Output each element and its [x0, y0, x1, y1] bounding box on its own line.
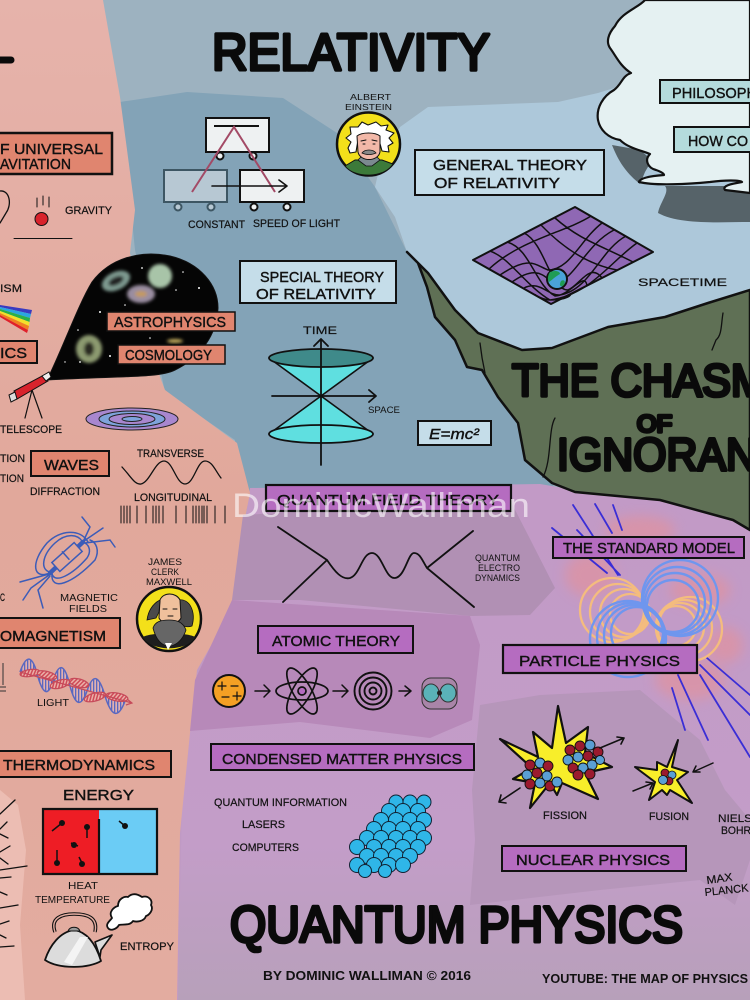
icon: fusion star [635, 740, 692, 803]
label box [211, 744, 474, 770]
title: of: OF [637, 411, 672, 438]
label text: optics: ICS [0, 345, 27, 362]
panel: electromagnetism [0, 517, 201, 713]
label: planck: PLANCK [704, 882, 750, 899]
label: fission: FISSION [543, 810, 587, 822]
label text: how: HOW CO [688, 133, 748, 150]
label: qed line three: DYNAMICS [475, 573, 520, 583]
fission arrows [499, 737, 624, 803]
title: relativity: RELATIVITY [212, 24, 490, 82]
label box [0, 133, 112, 174]
label: spacetime: SPACETIME [638, 277, 727, 289]
chart: light cone [269, 325, 400, 465]
label: fields: FIELDS [69, 604, 107, 615]
name line one: ALBERT [350, 93, 391, 102]
label box: cosmology [118, 345, 225, 364]
moustache [362, 150, 376, 154]
label fragments: TION [0, 453, 25, 465]
label text: ATOMIC THEORY [272, 633, 400, 650]
membrane [473, 207, 653, 304]
blue jets [552, 504, 750, 757]
background: quantum field theory region [232, 500, 555, 616]
label: computers: COMPUTERS [232, 842, 299, 854]
label box [266, 485, 511, 511]
icon: crystal lattice [350, 795, 432, 878]
label text: waves: WAVES [44, 457, 99, 474]
label box: how [674, 127, 750, 152]
cones [269, 358, 373, 434]
lower left faded carriage [164, 170, 227, 210]
arrow [255, 685, 270, 697]
box [415, 150, 604, 195]
credit: youtube: YOUTUBE: THE MAP OF PHYSICS [542, 972, 748, 986]
portrait: Einstein [337, 93, 400, 176]
features [361, 140, 377, 144]
icon: telescope [9, 372, 51, 418]
background: classical physics region [0, 0, 250, 1000]
icon: magnetic field [20, 517, 115, 608]
icon: ripple rings [86, 408, 178, 430]
label line one: F UNIVERSAL [0, 141, 103, 158]
credit: author: BY DOMINIC WALLIMAN © 2016 [263, 969, 471, 983]
chart: spacetime grid [473, 207, 727, 304]
label: space: SPACE [368, 405, 400, 416]
label: heat: HEAT [68, 881, 98, 892]
icon: orbital atom [276, 664, 328, 718]
label box [0, 618, 120, 648]
box [418, 421, 491, 445]
cloud shadow: left [612, 145, 652, 184]
label: light: LIGHT [37, 698, 69, 709]
background: chasm of ignorance [407, 252, 750, 530]
label fragment: C [0, 592, 5, 604]
wheels upper [216, 152, 256, 160]
warped grid lines [489, 216, 637, 300]
panel: quantum field theory [266, 485, 520, 607]
label: james: JAMES [148, 557, 182, 567]
label box: philosophy [660, 80, 750, 103]
panel: general relativity train [164, 118, 340, 231]
cloud shadow: right [658, 186, 750, 222]
lower right carriage [240, 170, 304, 210]
top rim [269, 349, 373, 367]
longitudinal wave [121, 506, 225, 523]
name line two: EINSTEIN [345, 103, 392, 112]
label text: standard model: THE STANDARD MODEL [563, 540, 735, 557]
label: max: MAX [706, 871, 734, 887]
panel: nuclear physics [499, 706, 750, 899]
chasm cracks [480, 313, 723, 477]
label: constant: CONSTANT [188, 219, 245, 231]
panel: universal gravitation [0, 133, 113, 238]
background: lower-left pale wedge [0, 790, 26, 1000]
label text: QUANTUM FIELD THEORY [277, 492, 499, 509]
label text: particle physics: PARTICLE PHYSICS [519, 653, 680, 670]
label box [0, 751, 171, 777]
collar [358, 156, 380, 166]
orange rings [580, 578, 722, 661]
label: transverse: TRANSVERSE [137, 448, 204, 460]
mirror [214, 125, 259, 127]
label: prism: ISM [0, 283, 22, 295]
label: fusion: FUSION [649, 811, 689, 823]
fusion nucleus [658, 769, 676, 785]
background: relativity region [0, 0, 750, 520]
background: darker special relativity region [120, 92, 560, 510]
axes [272, 339, 376, 465]
small title fragment [0, 56, 11, 64]
light path [192, 127, 275, 192]
panel: optics [0, 283, 37, 363]
label box: optics [0, 341, 37, 363]
icon: light wave [20, 659, 132, 713]
label text: nuclear physics: NUCLEAR PHYSICS [516, 852, 670, 869]
label text: cosmology: COSMOLOGY [125, 347, 212, 364]
label: energy: ENERGY [63, 787, 134, 804]
background: atomic theory region [190, 600, 480, 738]
label box: nuclear physics [502, 846, 686, 871]
label text: astrophysics: ASTROPHYSICS [114, 314, 226, 331]
hair [346, 122, 394, 153]
feynman diagram [278, 527, 474, 607]
label box: astrophysics [107, 312, 235, 331]
label line two: AVITATION [0, 156, 71, 173]
left spikes [0, 800, 27, 947]
label fragments lower: TION [0, 473, 24, 485]
ground line [14, 238, 72, 240]
bottom rim [269, 425, 373, 443]
gas chamber cold [99, 809, 157, 874]
fission nucleus left [522, 758, 562, 791]
background: general relativity region [375, 80, 750, 350]
label: entropy: ENTROPY [120, 941, 175, 953]
arrow [333, 685, 348, 697]
label: time: TIME [303, 325, 337, 337]
title: quantum physics: QUANTUM PHYSICS [230, 896, 683, 953]
label box: waves [31, 451, 109, 476]
label: maxwell: MAXWELL [146, 577, 192, 587]
icon: rainbow prism [0, 305, 32, 333]
label: magnetic: MAGNETIC [60, 593, 118, 604]
panel: special relativity [240, 261, 396, 303]
gas chamber hot [43, 809, 99, 874]
panel: philosophy cloud [598, 0, 750, 193]
label box: particle physics [503, 645, 697, 673]
fusion arrows [633, 763, 713, 791]
upper carriage [206, 118, 269, 152]
line two: OF RELATIVITY [256, 286, 376, 303]
icon: earth [547, 269, 567, 289]
transverse wave [122, 461, 221, 484]
icon: falling apple [35, 196, 49, 226]
capacitor fragment [0, 663, 6, 691]
panel: atomic theory [213, 626, 457, 718]
pink particle haze [565, 516, 743, 700]
portrait: Maxwell [137, 587, 201, 651]
label box [240, 261, 396, 303]
panel: standard model collision [503, 504, 750, 757]
galaxies [76, 264, 183, 363]
icon: bulb curve [0, 191, 9, 223]
icon: plum pudding atom [213, 675, 245, 707]
portrait circle [337, 112, 400, 176]
face [357, 133, 380, 160]
icon: electron cloud orbital [422, 678, 457, 709]
label: qed line two: ELECTRO [478, 563, 520, 573]
label text: CONDENSED MATTER PHYSICS [222, 751, 462, 768]
cloud outline [598, 0, 750, 193]
label box: standard model [553, 537, 744, 558]
motion arrow [212, 180, 287, 192]
icon: fission star [500, 706, 612, 808]
equation: E=mc² [429, 426, 480, 443]
label text: OMAGNETISM [0, 628, 106, 645]
label: qed line one: QUANTUM [475, 553, 520, 563]
label: quantum information: QUANTUM INFORMATION [214, 797, 347, 809]
panel: general theory label [415, 150, 604, 195]
label: gravity: GRAVITY [65, 205, 113, 217]
icon: bohr rings [354, 672, 392, 710]
panel: astrophysics bubble [47, 254, 235, 380]
equation box [418, 421, 491, 445]
background: nuclear region [470, 690, 750, 905]
blue rings [590, 560, 718, 677]
label: temperature: TEMPERATURE [35, 895, 110, 906]
gas molecules [52, 820, 128, 867]
label: telescope: TELESCOPE [0, 424, 62, 436]
background: quantum physics region [178, 484, 750, 1000]
stars [64, 267, 206, 363]
panel: condensed matter [211, 744, 474, 878]
arrow [399, 686, 411, 696]
black space bubble [47, 254, 218, 380]
panel: thermodynamics [0, 751, 175, 967]
chamber frame [43, 809, 157, 874]
line two: OF RELATIVITY [434, 175, 560, 192]
label box [258, 626, 413, 653]
label: niels: NIELS [718, 813, 750, 825]
fission nucleus right [563, 740, 604, 780]
line one: GENERAL THEORY [433, 157, 587, 174]
line one: SPECIAL THEORY [260, 269, 384, 286]
label: lasers: LASERS [242, 819, 285, 831]
label text: THERMODYNAMICS [3, 757, 155, 774]
label: clerk: CLERK [151, 567, 179, 577]
jacket [345, 160, 393, 175]
label: speed of light: SPEED OF LIGHT [253, 218, 340, 230]
label: longitudinal: LONGITUDINAL [134, 492, 212, 504]
icon: kettle [45, 914, 112, 967]
icon: steam cloud [107, 894, 152, 930]
panel: waves [0, 448, 225, 523]
watermark: DominicWalliman [232, 487, 530, 525]
label: diffraction: DIFFRACTION [30, 486, 100, 498]
